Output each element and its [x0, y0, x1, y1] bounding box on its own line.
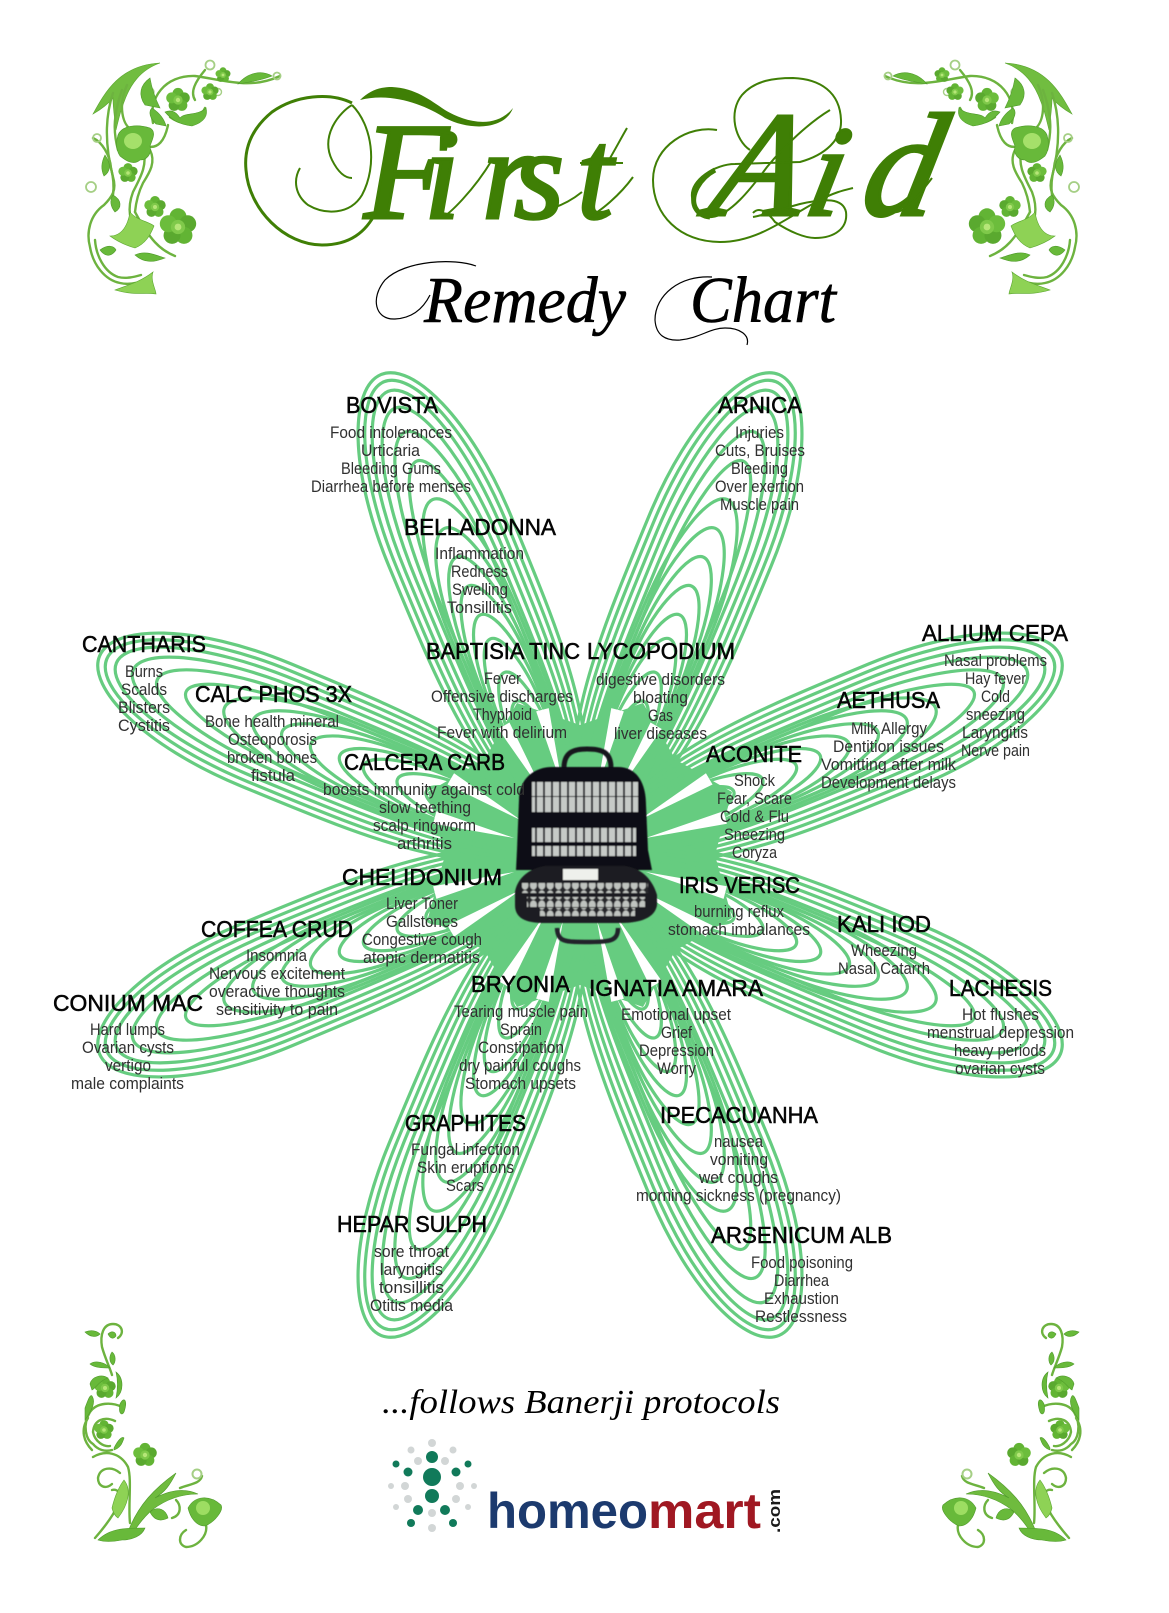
remedy: AETHUSA [821, 687, 956, 792]
symptoms: Hot flushes [962, 1005, 1039, 1024]
logo: homeomart wordmark [487, 1483, 784, 1539]
symptoms [944, 651, 1047, 760]
symptoms [668, 902, 810, 939]
remedy: CANTHARIS [82, 631, 206, 735]
symptoms: laryngitis [380, 1260, 443, 1279]
heading: IRIS VERISC [679, 872, 800, 898]
heading: CANTHARIS [82, 631, 206, 657]
symptoms: overactive thoughts [209, 982, 345, 1001]
symptoms [717, 771, 792, 862]
heading: CALC PHOS 3X [195, 681, 352, 707]
ornament: top left corner [86, 60, 280, 294]
symptoms: Fear, Scare [717, 789, 792, 808]
symptoms: liver diseases [614, 724, 707, 743]
symptoms: Gas [648, 706, 673, 725]
symptoms: Muscle pain [720, 495, 799, 514]
symptoms: Bleeding [731, 459, 788, 478]
remedy: BRYONIA [454, 971, 588, 1093]
heading: GRAPHITES [405, 1110, 526, 1136]
symptoms: Otitis media [370, 1296, 454, 1315]
symptoms [596, 670, 725, 743]
heading: LACHESIS [949, 975, 1052, 1001]
symptoms: vertigo [105, 1056, 151, 1075]
heading: ALLIUM CEPA [922, 620, 1068, 646]
symptoms [118, 662, 170, 735]
symptoms: Nasal problems [944, 651, 1047, 670]
symptoms: sensitivity to pain [216, 1000, 338, 1019]
heading: COFFEA CRUD [201, 916, 353, 942]
symptoms: Nerve pain [961, 741, 1030, 760]
remedy: BELLADONNA [404, 514, 556, 617]
symptoms: tonsillitis [379, 1278, 444, 1297]
symptoms [311, 423, 471, 496]
symptoms: Sneezing [724, 825, 785, 844]
subtitle: Remedy Chart: Remedy [423, 264, 627, 337]
symptoms [362, 894, 482, 967]
symptoms [435, 544, 524, 617]
symptoms: Milk Allergy [851, 719, 927, 738]
symptoms: Skin eruptions [417, 1158, 514, 1177]
symptoms: Grief [661, 1023, 692, 1042]
symptoms: Stomach upsets [465, 1074, 576, 1093]
symptoms: stomach imbalances [668, 920, 810, 939]
symptoms: atopic dermatitis [363, 948, 480, 967]
symptoms: dry painful coughs [459, 1056, 581, 1075]
symptoms: Urticaria [361, 441, 420, 460]
symptoms: fistula [251, 766, 296, 785]
symptoms: Injuries [735, 423, 784, 442]
symptoms: Blisters [118, 698, 170, 717]
symptoms: Scalds [121, 680, 167, 699]
remedy: BOVISTA [311, 392, 471, 496]
symptoms: Diarrhea before menses [311, 477, 471, 496]
title: First Aid: i [796, 101, 862, 244]
symptoms: Cystitis [118, 716, 170, 735]
symptoms: burning reflux [694, 902, 784, 921]
F flourishes drawn as decorative swashes [246, 97, 376, 245]
heading: ARSENICUM ALB [711, 1222, 892, 1248]
symptoms [621, 1005, 731, 1078]
symptoms: morning sickness (pregnancy) [636, 1186, 841, 1205]
symptoms: Congestive cough [362, 930, 482, 949]
symptoms: Vomitting after milk [821, 755, 956, 774]
heading: CONIUM MAC [53, 990, 203, 1016]
symptoms: Sprain [500, 1020, 542, 1039]
symptoms: Insomnia [246, 946, 307, 965]
symptoms: Nervous excitement [209, 964, 345, 983]
remedy: KALI IOD [837, 911, 931, 978]
heading: BOVISTA [346, 392, 438, 418]
symptoms: Diarrhea [774, 1271, 829, 1290]
symptoms [323, 780, 525, 853]
remedy: ACONITE [706, 741, 802, 862]
title: First Aid: d [851, 85, 960, 248]
symptoms: male complaints [71, 1074, 184, 1093]
symptoms: Offensive discharges [431, 687, 573, 706]
symptoms: Burns [125, 662, 163, 681]
symptoms: Liver Toner [386, 894, 458, 913]
heading: IPECACUANHA [660, 1102, 818, 1128]
symptoms [431, 669, 573, 742]
symptoms: Bleeding Gums [341, 459, 441, 478]
title: First Aid: irst [424, 103, 616, 246]
symptoms: Gallstones [386, 912, 458, 931]
remedy: ALLIUM CEPA [922, 620, 1068, 760]
heading: ACONITE [706, 741, 802, 767]
symptoms: ovarian cysts [955, 1059, 1045, 1078]
symptoms: Nasal Catarrh [838, 959, 930, 978]
logo: homeomart wordmark: mart [648, 1483, 761, 1539]
symptoms: Hay fever [965, 669, 1026, 688]
symptoms [636, 1132, 841, 1205]
symptoms [71, 1020, 184, 1093]
symptoms: arthritis [397, 834, 452, 853]
remedy: CALC PHOS 3X [195, 681, 352, 785]
subtitle: Remedy Chart: Chart [690, 264, 838, 337]
symptoms: Laryngitis [962, 723, 1028, 742]
heading: CHELIDONIUM [342, 864, 502, 890]
symptoms: bloating [633, 688, 688, 707]
symptoms: Swelling [452, 580, 508, 599]
symptoms: menstrual depression [927, 1023, 1074, 1042]
symptoms: Scars [446, 1176, 484, 1195]
symptoms: Osteoporosis [228, 730, 317, 749]
symptoms: Redness [451, 562, 508, 581]
remedy: IGNATIA AMARA [589, 975, 763, 1078]
heading: BELLADONNA [404, 514, 556, 540]
symptoms [205, 712, 339, 785]
remedy: LYCOPODIUM [587, 638, 735, 743]
remedy: IRIS VERISC [668, 872, 810, 939]
icon: remedy kit bag [515, 749, 657, 942]
symptoms: Bone health mineral [205, 712, 339, 731]
symptoms [209, 946, 345, 1019]
heading: CALCERA CARB [344, 749, 505, 775]
remedy: BAPTISIA TINC [426, 638, 580, 742]
subtitle: Remedy Chart [376, 262, 838, 345]
symptoms [927, 1005, 1074, 1078]
symptoms: Dentition issues [833, 737, 944, 756]
symptoms: Cold [981, 687, 1010, 706]
symptoms: heavy periods [954, 1041, 1046, 1060]
heading: ARNICA [718, 392, 802, 418]
symptoms: Cuts, Bruises [715, 441, 805, 460]
symptoms: slow teething [379, 798, 471, 817]
symptoms [751, 1253, 853, 1326]
symptoms: Emotional upset [621, 1005, 731, 1024]
symptoms: broken bones [227, 748, 317, 767]
remedy: ARSENICUM ALB [711, 1222, 892, 1326]
symptoms [370, 1242, 454, 1315]
symptoms: Food intolerances [330, 423, 452, 442]
symptoms: Restlessness [755, 1307, 847, 1326]
remedy: HEPAR SULPH [337, 1211, 487, 1315]
logo: homeomart wordmark: .com [765, 1489, 784, 1533]
symptoms [821, 719, 956, 792]
logo: homeomart dots icon [388, 1439, 477, 1532]
symptoms: vomiting [710, 1150, 768, 1169]
title: First Aid [246, 78, 961, 248]
symptoms: Hard lumps [90, 1020, 165, 1039]
symptoms: digestive disorders [596, 670, 725, 689]
ornament: top right corner [884, 60, 1079, 294]
title: First Aid: A [690, 81, 827, 248]
symptoms: Over exertion [715, 477, 804, 496]
heading: BRYONIA [471, 971, 570, 997]
heading: AETHUSA [837, 687, 940, 713]
symptoms: Tearing muscle pain [454, 1002, 588, 1021]
heading: KALI IOD [837, 911, 931, 937]
symptoms: Exhaustion [764, 1289, 839, 1308]
symptoms: nausea [714, 1132, 763, 1151]
symptoms: Thyphoid [473, 705, 532, 724]
remedy: CONIUM MAC [53, 990, 203, 1093]
symptoms: Wheezing [851, 941, 917, 960]
symptoms: Fever with delirium [437, 723, 567, 742]
symptoms: scalp ringworm [373, 816, 476, 835]
symptoms: sore throat [374, 1242, 449, 1261]
remedy: ARNICA [715, 392, 805, 514]
flower of remedy petals [74, 349, 1086, 1361]
remedy: CHELIDONIUM [342, 864, 502, 967]
symptoms: Fungal infection [411, 1140, 520, 1159]
remedy: COFFEA CRUD [201, 916, 353, 1019]
remedy: GRAPHITES [405, 1110, 526, 1195]
symptoms: Tonsillitis [447, 598, 512, 617]
symptoms: Depression [639, 1041, 714, 1060]
symptoms: Food poisoning [751, 1253, 853, 1272]
remedy: LACHESIS [927, 975, 1074, 1078]
symptoms: sneezing [966, 705, 1025, 724]
heading: IGNATIA AMARA [589, 975, 763, 1001]
ornament: bottom left corner [84, 1324, 222, 1547]
symptoms: Constipation [478, 1038, 564, 1057]
symptoms: boosts immunity against cold [323, 780, 525, 799]
symptoms [411, 1140, 520, 1195]
heading: LYCOPODIUM [587, 638, 735, 664]
heading: HEPAR SULPH [337, 1211, 487, 1237]
symptoms: Coryza [732, 843, 777, 862]
symptoms: Shock [734, 771, 775, 790]
symptoms: Cold & Flu [720, 807, 789, 826]
symptoms: wet coughs [698, 1168, 778, 1187]
symptoms [715, 423, 805, 514]
tagline: follows Banerji protocols: ...follows Banerji protocols [382, 1384, 780, 1421]
symptoms: Development delays [821, 773, 956, 792]
symptoms: Ovarian cysts [82, 1038, 174, 1057]
heading: BAPTISIA TINC [426, 638, 580, 664]
logo: homeomart wordmark: homeo [487, 1483, 648, 1539]
ornament: bottom right corner [942, 1324, 1080, 1547]
symptoms [838, 941, 930, 978]
symptoms: Worry [657, 1059, 696, 1078]
remedy: CALCERA CARB [323, 749, 525, 853]
symptoms: Inflammation [435, 544, 524, 563]
title: First Aid: F [363, 95, 450, 248]
symptoms [454, 1002, 588, 1093]
remedy: IPECACUANHA [636, 1102, 841, 1205]
symptoms: Fever [484, 669, 521, 688]
